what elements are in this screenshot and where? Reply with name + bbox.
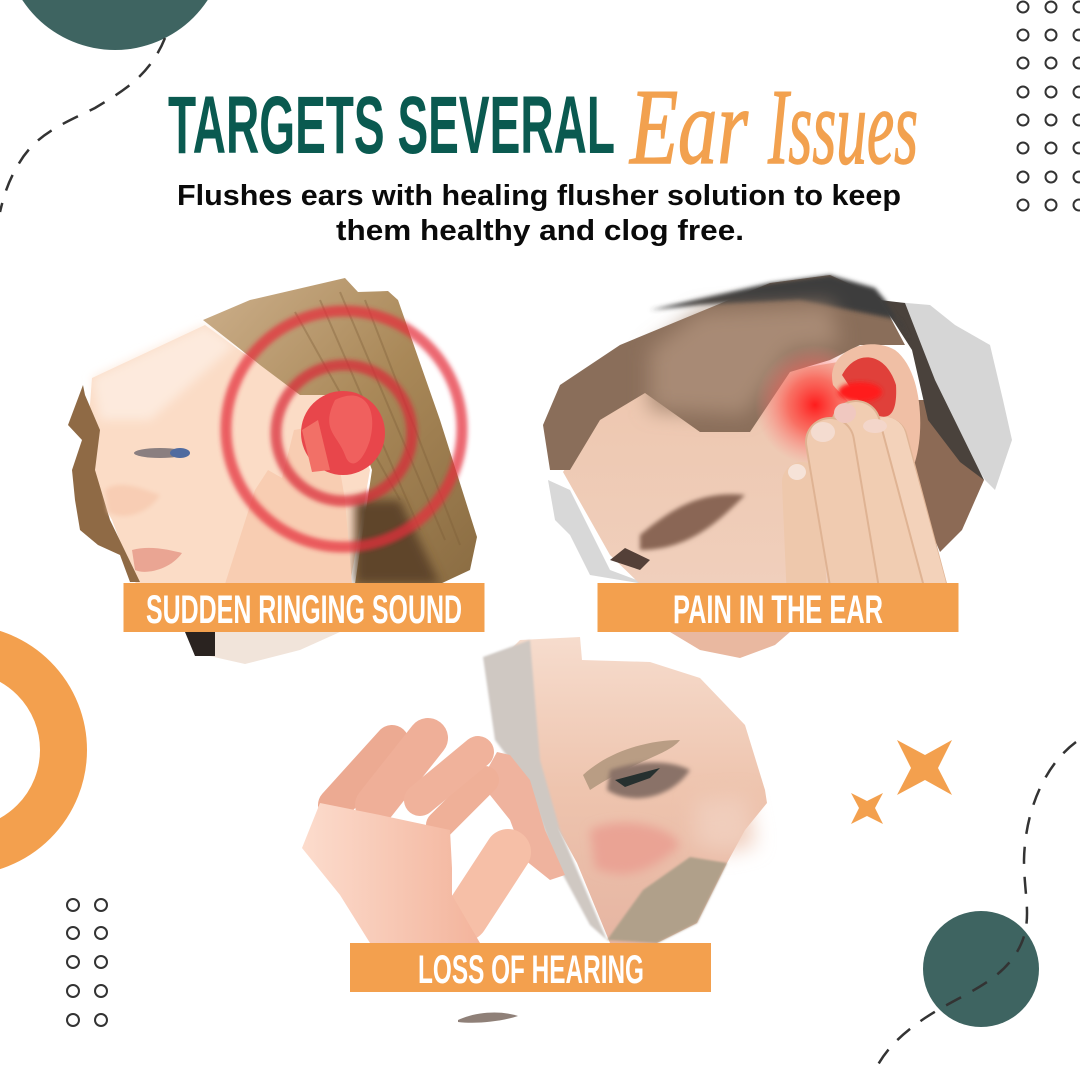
subtitle: Flushes ears with healing flusher solution to keep <box>177 180 901 212</box>
decoration: bottom-right green circle <box>923 911 1039 1027</box>
panel: sudden ringing sound <box>68 278 484 664</box>
label text: LOSS OF HEARING <box>418 948 644 992</box>
label bar <box>350 943 711 992</box>
photo: man holding his ear <box>543 275 1012 658</box>
panel: loss of hearing <box>302 637 767 1023</box>
decoration: bottom-right dashed curve <box>874 742 1076 1072</box>
decoration: top-right dot grid <box>1018 2 1080 210</box>
label text: SUDDEN RINGING SOUND <box>146 588 462 632</box>
title: TARGETS SEVERAL <box>168 80 615 171</box>
photo: older man cupping his ear <box>302 637 767 1023</box>
decoration: bottom-left dot grid <box>67 899 107 1026</box>
icon: sparkle stars <box>851 740 952 824</box>
subtitle <box>177 180 901 247</box>
decoration: orange ring <box>0 648 64 852</box>
subtitle: them healthy and clog free. <box>336 215 744 247</box>
decoration: top-left dashed curve <box>0 38 165 212</box>
label text: PAIN IN THE EAR <box>673 588 883 632</box>
title: Ear <box>629 68 749 187</box>
label bar <box>598 583 958 632</box>
label bar <box>124 583 484 632</box>
photo: woman holding her ear <box>68 278 477 664</box>
decoration: top-left green circle <box>4 0 226 50</box>
panel: pain in the ear <box>543 275 1012 658</box>
title: Issues <box>767 68 918 187</box>
